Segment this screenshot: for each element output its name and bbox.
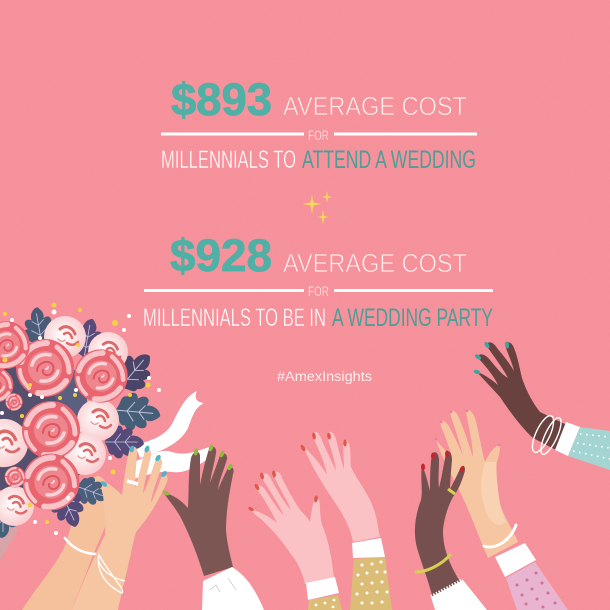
nail polish [100, 445, 168, 488]
heading: $893 average cost: $893 [171, 74, 272, 125]
bouquet berries [0, 302, 161, 535]
bangles [528, 413, 565, 457]
top right dark hand [473, 341, 610, 470]
bangle [416, 555, 450, 572]
subheading: attend a wedding [161, 146, 476, 174]
cuff [431, 580, 487, 610]
cuff and sleeve [306, 577, 339, 600]
nail polish [473, 341, 510, 375]
cuff and sleeve [555, 422, 580, 456]
divider: for: FOR [308, 283, 329, 299]
bouquet roses [0, 321, 128, 510]
ring [127, 481, 138, 484]
divider: for [144, 283, 493, 299]
cuff and sleeve [352, 538, 385, 558]
heading: $893 average cost [171, 74, 467, 125]
bouquet leaves [0, 305, 162, 538]
cuff [202, 567, 264, 610]
divider: for [161, 127, 477, 143]
bangles [98, 555, 125, 593]
cuff and sleeve [495, 543, 536, 577]
divider: for: FOR [308, 127, 329, 143]
icon: sparkles [303, 191, 332, 225]
bracelet: pearls [65, 538, 97, 554]
subheading: attend a wedding: ATTEND A WEDDING [302, 146, 476, 174]
subheading: wedding party: A WEDDING PARTY [332, 304, 493, 332]
hashtag: #AmexInsights [277, 369, 372, 384]
bouquet [0, 302, 162, 560]
nail polish [248, 470, 318, 512]
heading: $893 average cost: AVERAGE COST [283, 91, 467, 121]
nail polish [435, 410, 500, 446]
nail polish [162, 444, 233, 496]
nail polish [421, 450, 465, 473]
heading: $928 average cost [170, 230, 467, 281]
front tan hand [72, 445, 168, 610]
subheading: wedding party: MILLENNIALS TO BE IN [143, 304, 326, 332]
heading: $928 average cost: AVERAGE COST [283, 248, 467, 278]
left tan hand [22, 476, 112, 610]
heading: $928 average cost: $928 [170, 230, 272, 281]
brown hand, red nails [415, 450, 487, 610]
ribbon [130, 391, 212, 480]
beaded bracelet [484, 525, 516, 547]
bouquet peonies [0, 316, 128, 526]
nail polish [300, 432, 347, 452]
ring [448, 489, 455, 494]
subheading: attend a wedding: MILLENNIALS TO [161, 146, 296, 174]
dark brown hand, green nails [162, 444, 264, 610]
tan hand, pink sleeve [435, 410, 568, 610]
pink hand two [300, 432, 392, 610]
bouquet dark centre [3, 358, 87, 442]
pink hand one [248, 470, 342, 610]
